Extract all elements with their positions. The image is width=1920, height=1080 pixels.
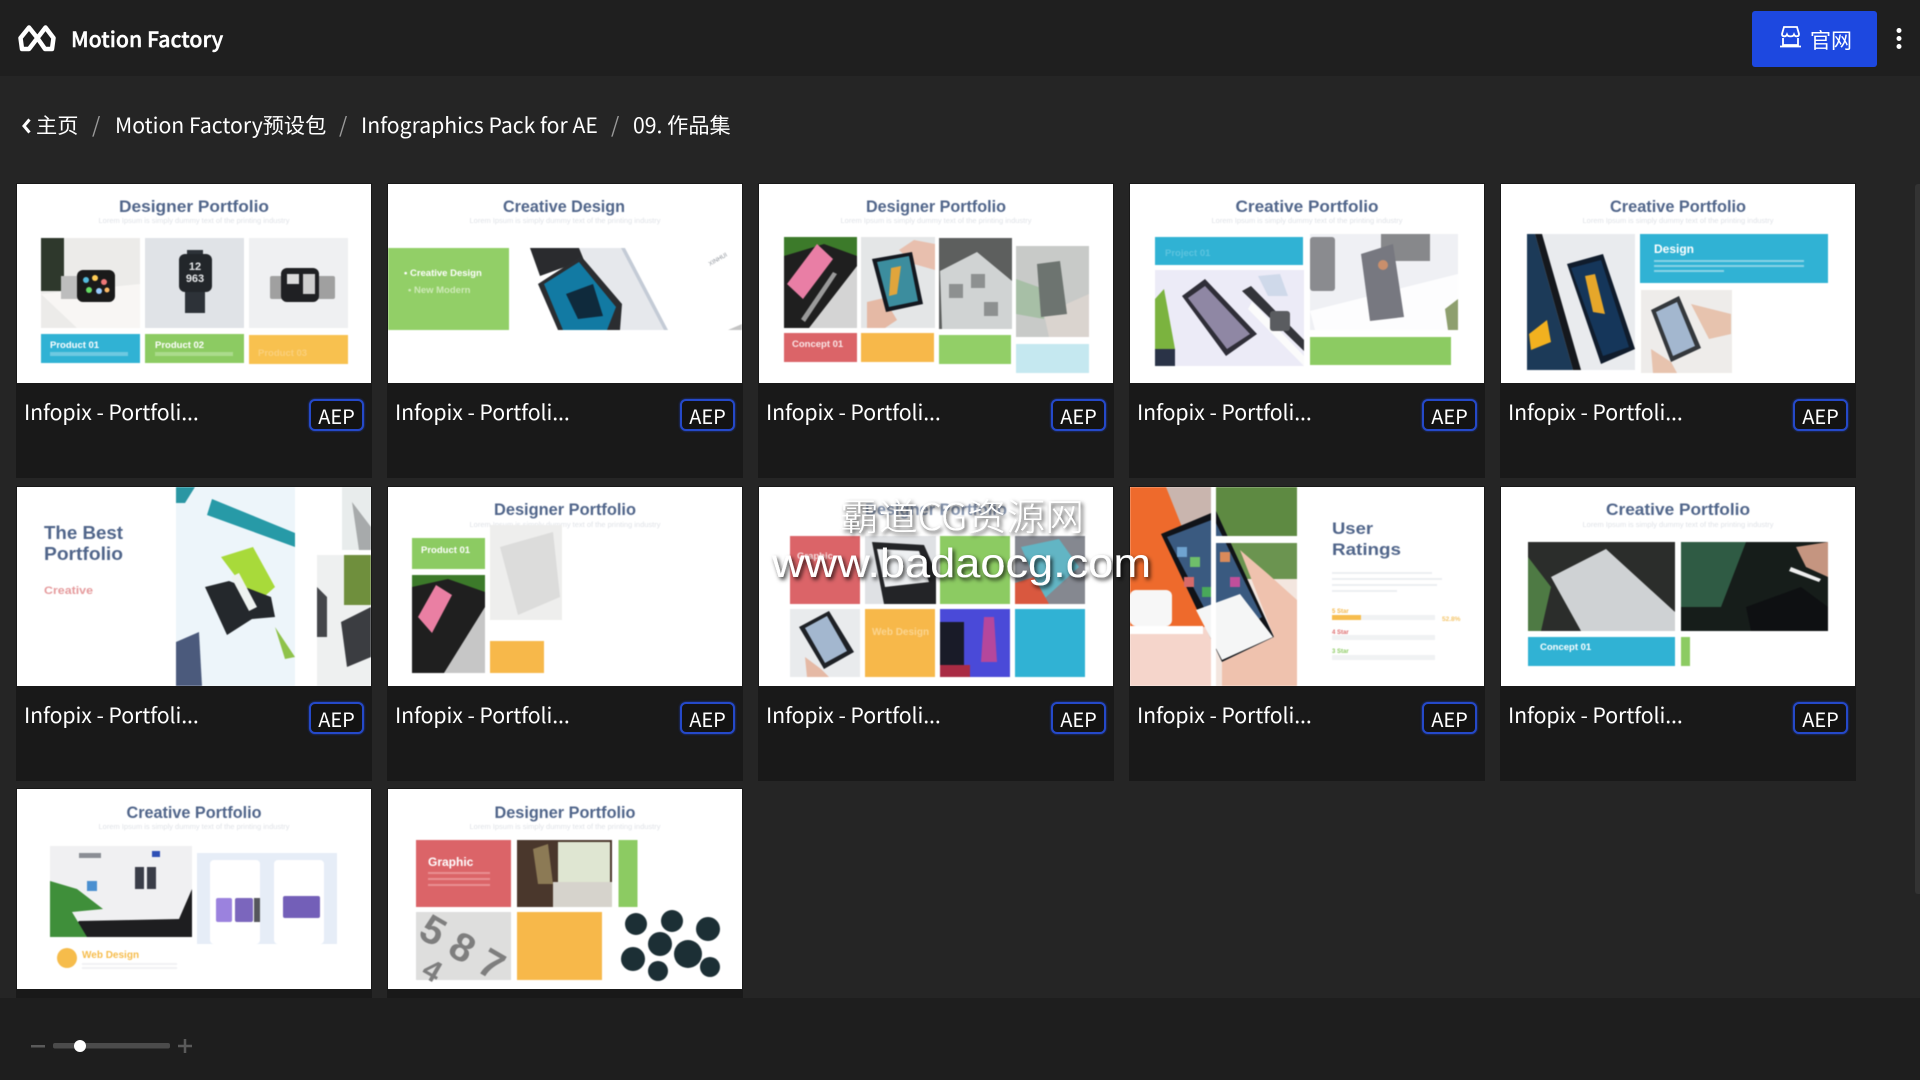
- thumbnail: designer portfolio product: Designer Portfolio: [494, 500, 636, 519]
- thumbnail: user ratings: User: [1332, 519, 1373, 538]
- card 9: [1129, 486, 1485, 781]
- crumb separator: /: [92, 109, 100, 140]
- card name: Infopix - Portfoli...: [1508, 396, 1683, 427]
- thumbnail: designer portfolio graphic: Lorem Ipsum is simply dummy text of the printing industry: [470, 824, 661, 831]
- footer bar: [0, 998, 1920, 1080]
- watermark: www.badaocg.com: [771, 540, 1151, 586]
- thumbnail: the best portfolio: Creative: [44, 585, 93, 597]
- crumb: home: 主页: [36, 109, 78, 140]
- thumbnail: user ratings: 4 Star: [1332, 630, 1349, 636]
- thumbnail: user ratings: 3 Star: [1332, 649, 1349, 655]
- format badge: AEP: [689, 704, 726, 733]
- thumbnail: user ratings: Ratings: [1332, 540, 1401, 559]
- thumbnail: creative design watch: • Creative Design: [404, 268, 482, 279]
- format badge: AEP: [1060, 704, 1097, 733]
- thumbnail: creative portfolio web design: Lorem Ipsum is simply dummy text of the printing industry: [98, 824, 290, 831]
- thumbnail: creative portfolio design: Creative Portfolio: [1610, 197, 1746, 216]
- thumbnail: creative portfolio phone: Creative Portfolio: [1236, 197, 1378, 216]
- format badge: [680, 702, 735, 734]
- card 11: [16, 788, 372, 1080]
- thumbnail: designer portfolio product: Lorem Ipsum is simply dummy text of the printing industry: [470, 522, 661, 529]
- format badge: AEP: [318, 401, 355, 430]
- card name: Infopix - Portfoli...: [766, 699, 941, 730]
- thumbnail: designer portfolio concept: Concept 01: [792, 339, 844, 350]
- format badge: AEP: [1431, 401, 1468, 430]
- format badge: AEP: [1060, 401, 1097, 430]
- thumbnail: designer portfolio watches: 963: [186, 273, 204, 285]
- card name: Infopix - Portfoli...: [1137, 699, 1312, 730]
- format badge: AEP: [689, 401, 726, 430]
- card name: Infopix - Portfoli...: [766, 396, 941, 427]
- card 1: [16, 183, 372, 478]
- card name: Infopix - Portfoli...: [24, 1001, 199, 1032]
- thumbnail: creative portfolio phone: [1130, 184, 1484, 383]
- format badge: [1793, 399, 1848, 431]
- icon: store: [1780, 26, 1801, 48]
- website button: [1752, 11, 1877, 67]
- format badge: [309, 702, 364, 734]
- thumbnail: creative portfolio concept: Concept 01: [1540, 642, 1592, 653]
- thumbnail: designer portfolio product: Product 01: [421, 545, 471, 556]
- thumbnail: designer portfolio watches: Product 03: [258, 348, 307, 359]
- button label: 官网: [1810, 25, 1852, 55]
- card 4: [1129, 183, 1485, 478]
- card name: Infopix - Portfoli...: [1508, 699, 1683, 730]
- crumb: infographics pack: Infographics Pack for AE: [361, 109, 598, 140]
- thumbnail: user ratings: 52.8%: [1442, 616, 1461, 623]
- card 7: [387, 486, 743, 781]
- card 5: [1500, 183, 1856, 478]
- crumb: preset pack: Motion Factory预设包: [115, 109, 326, 140]
- format badge: [1793, 702, 1848, 734]
- card name: Infopix - Portfoli...: [1137, 396, 1312, 427]
- thumbnail: designer portfolio watches: Product 02: [155, 340, 204, 351]
- thumbnail: creative portfolio phone: Lorem Ipsum is simply dummy text of the printing industry: [1212, 218, 1403, 225]
- thumbnail: creative portfolio concept: Lorem Ipsum is simply dummy text of the printing industry: [1582, 522, 1774, 529]
- thumbnail: user ratings: [1130, 487, 1484, 686]
- format badge: [1051, 399, 1106, 431]
- thumbnail: designer portfolio grid: Web Design: [872, 627, 929, 638]
- thumbnail: creative design watch: Lorem Ipsum is simply dummy text of the printing industry: [470, 218, 661, 225]
- format badge: [680, 399, 735, 431]
- thumbnail: creative portfolio web design: Web Design: [82, 950, 139, 961]
- crumb separator: /: [611, 109, 619, 140]
- thumbnail: designer portfolio grid: [759, 487, 1113, 686]
- format badge: [1422, 702, 1477, 734]
- thumbnail: creative portfolio phone: Project 01: [1165, 248, 1211, 259]
- watermark: [771, 490, 1154, 592]
- breadcrumb: [22, 109, 731, 140]
- thumbnail: designer portfolio grid: Graphic: [797, 551, 833, 562]
- card 12: [387, 788, 743, 1080]
- logo icon: [18, 25, 56, 52]
- thumbnail: designer portfolio watches: [17, 184, 371, 383]
- card 3: [758, 183, 1114, 478]
- thumbnail: creative portfolio web design: [17, 789, 371, 989]
- thumbnail: designer portfolio grid: Designer Portfolio: [865, 500, 1007, 519]
- thumbnail: creative portfolio design: [1501, 184, 1855, 383]
- card name: Infopix - Portfoli...: [395, 1001, 570, 1032]
- crumb: portfolio: 09. 作品集: [633, 109, 731, 140]
- thumbnail: creative design watch: Creative Design: [503, 197, 625, 216]
- format badge: AEP: [318, 704, 355, 733]
- card name: Infopix - Portfoli...: [24, 396, 199, 427]
- thumbnail: creative portfolio web design: Creative Portfolio: [126, 803, 262, 822]
- thumbnail: the best portfolio: The Best: [44, 523, 123, 543]
- zoom slider: [31, 1039, 192, 1053]
- thumbnail: creative portfolio concept: [1501, 487, 1855, 686]
- crumb separator: /: [339, 109, 347, 140]
- thumbnail: designer portfolio concept: Lorem Ipsum is simply dummy text of the printing industry: [840, 218, 1032, 225]
- thumbnail: designer portfolio graphic: 5 8 7: [412, 906, 512, 989]
- thumbnail: creative design watch: • New Modern: [408, 285, 471, 296]
- thumbnail: designer portfolio concept: Designer Portfolio: [866, 197, 1006, 216]
- icon: kebab menu: [1896, 28, 1902, 49]
- thumbnail: designer portfolio watches: Designer Portfolio: [119, 197, 269, 216]
- format badge: [309, 399, 364, 431]
- thumbnail: the best portfolio: Portfolio: [44, 544, 123, 564]
- header bar: [0, 0, 1920, 76]
- thumbnail: designer portfolio watches: Product 01: [50, 340, 100, 351]
- card 2: [387, 183, 743, 478]
- card 10: [1500, 486, 1856, 781]
- thumbnail: designer portfolio graphic: 4: [417, 953, 448, 989]
- card 8: [758, 486, 1114, 781]
- scrollbar: [1915, 184, 1920, 894]
- thumbnail: creative portfolio design: Design: [1654, 242, 1694, 256]
- thumbnail: designer portfolio product: [388, 487, 742, 686]
- thumbnail: creative portfolio concept: Creative Portfolio: [1606, 500, 1750, 519]
- thumbnail: designer portfolio graphic: Graphic: [428, 855, 474, 869]
- card name: Infopix - Portfoli...: [395, 396, 570, 427]
- thumbnail: designer portfolio graphic: [388, 789, 742, 989]
- format badge: AEP: [1802, 401, 1839, 430]
- thumbnail: the best portfolio: [17, 487, 371, 686]
- thumbnail: creative design watch: XINHUI: [708, 252, 729, 268]
- format badge: [1422, 399, 1477, 431]
- icon: back chevron: [22, 118, 31, 134]
- thumbnail: designer portfolio concept: [759, 184, 1113, 383]
- format badge: [1051, 702, 1106, 734]
- thumbnail: designer portfolio watches: 12: [189, 261, 201, 273]
- thumbnail: creative design watch: [388, 184, 742, 383]
- thumbnail: designer portfolio graphic: Designer Portfolio: [494, 803, 636, 822]
- brand name: Motion Factory: [71, 23, 223, 54]
- format badge: AEP: [1431, 704, 1468, 733]
- card name: Infopix - Portfoli...: [395, 699, 570, 730]
- card 6: [16, 486, 372, 781]
- thumbnail: user ratings: 5 Star: [1332, 609, 1349, 615]
- thumbnail: creative portfolio design: Lorem Ipsum is simply dummy text of the printing industry: [1582, 218, 1774, 225]
- thumbnail: designer portfolio watches: Lorem Ipsum is simply dummy text of the printing industry: [98, 218, 290, 225]
- card name: Infopix - Portfoli...: [24, 699, 199, 730]
- format badge: AEP: [1802, 704, 1839, 733]
